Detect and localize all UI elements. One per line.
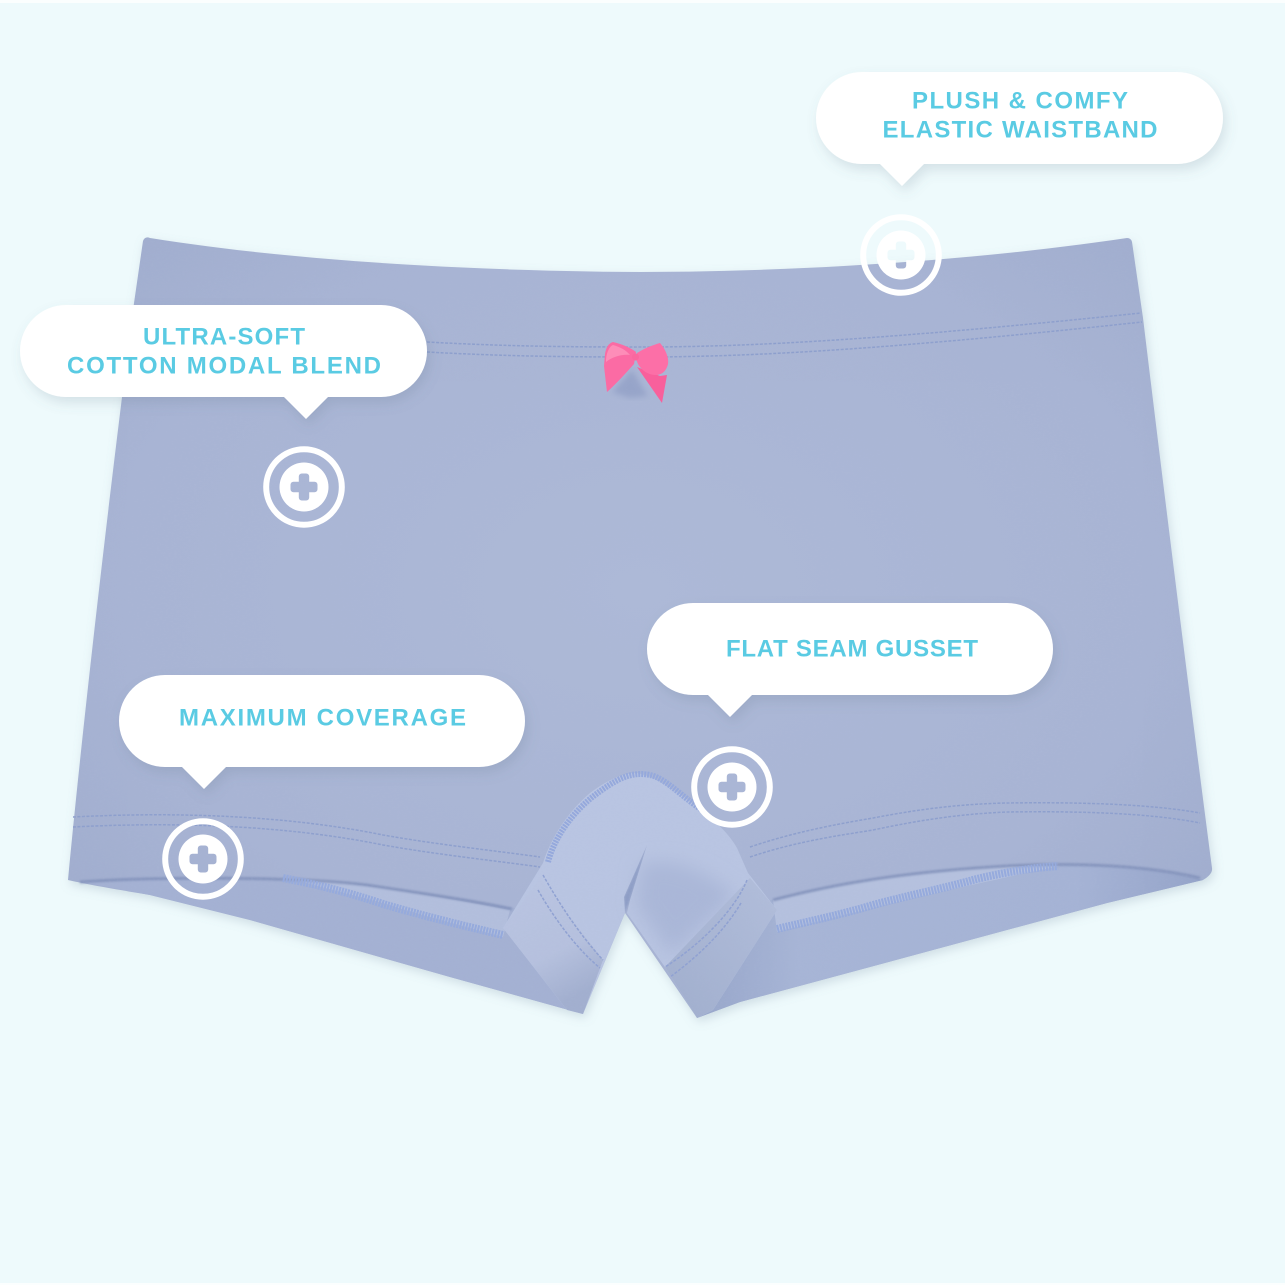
- right tail: [637, 367, 667, 403]
- right flap stitches: [665, 880, 747, 967]
- right inner seam: [777, 866, 1058, 929]
- icon: pink bow: [604, 342, 668, 403]
- left flap hem: [540, 946, 602, 1014]
- callout: maximum coverage: MAXIMUM COVERAGE: [179, 704, 466, 732]
- callout: plush and comfy elastic waistband: PLUSH & COMFY: [912, 88, 1128, 114]
- right flap hem: [665, 878, 777, 1018]
- left inner seam: [283, 878, 503, 935]
- callout: ultra-soft cotton modal blend: COTTON MODAL BLEND: [67, 352, 381, 380]
- right inner lining: [773, 866, 1060, 932]
- gusset arch stitching: [548, 774, 702, 862]
- hotspot: waistband: [863, 217, 939, 293]
- hotspot: fabric: [266, 449, 342, 525]
- right back layer: [697, 865, 1203, 1018]
- left hem edge: [80, 878, 512, 909]
- callout: flat seam gusset: [647, 603, 1053, 717]
- left hem stitches: [73, 815, 540, 857]
- callout: ultra-soft cotton modal blend: [20, 305, 427, 419]
- garment body: [68, 237, 1212, 1018]
- callout: ultra-soft cotton modal blend: ULTRA-SOFT: [143, 324, 305, 350]
- left inner lining: [283, 877, 510, 937]
- bow shadow: [612, 370, 648, 398]
- left wing: [604, 342, 636, 392]
- right hem edge: [773, 864, 1200, 900]
- right panel tone: [639, 864, 726, 946]
- waistband stitches: [427, 313, 1141, 347]
- gusset fold shadow: [624, 845, 647, 913]
- hotspot: coverage: [165, 821, 241, 897]
- left back layer: [80, 878, 583, 1014]
- right loop: [636, 343, 668, 375]
- fabric texture: [60, 230, 1220, 1025]
- gusset shading: [540, 864, 776, 1018]
- product photo: boyshort underwear: [60, 230, 1220, 1025]
- left loop highlight: [606, 345, 630, 362]
- bow knot: [632, 354, 639, 360]
- callout: maximum coverage: [119, 675, 525, 789]
- callout: flat seam gusset: FLAT SEAM GUSSET: [726, 636, 978, 662]
- hotspot: gusset: [694, 749, 770, 825]
- right hem stitches: [750, 803, 1200, 847]
- left flap stitches: [543, 875, 603, 960]
- callout: plush and comfy elastic waistband: [816, 72, 1223, 186]
- gusset: [503, 773, 777, 1018]
- callout: plush and comfy elastic waistband: ELASTIC WAISTBAND: [882, 116, 1158, 144]
